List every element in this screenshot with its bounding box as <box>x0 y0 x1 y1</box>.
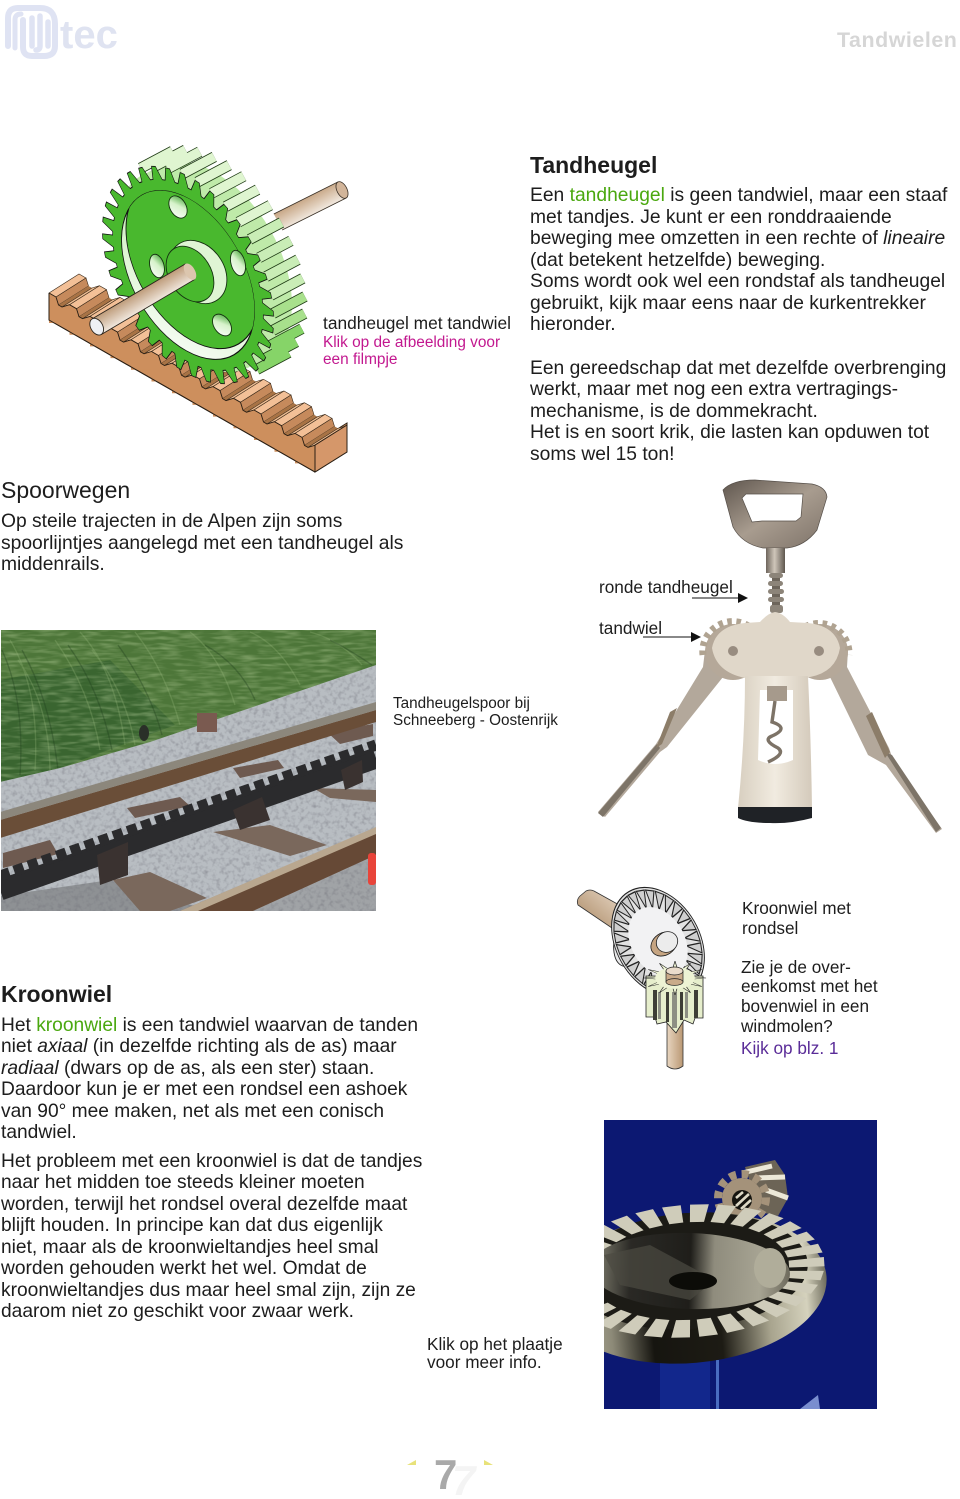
rear axle <box>274 180 351 230</box>
heading: Tandheugel: Tandheugel <box>530 152 657 178</box>
highlights <box>604 1245 786 1300</box>
number: 7 <box>434 1451 457 1498</box>
paragraph: crown wheel definition: Daardoor kun je er met een rondsel een ashoek <box>1 1079 407 1100</box>
blue background <box>604 1120 877 1409</box>
link: film: Klik op de afbeelding voor <box>323 334 500 350</box>
illustration: crown wheel with pinion <box>576 886 706 1070</box>
link: film <box>323 334 500 368</box>
paragraph: car jack: mechanisme, is de dommekracht. <box>530 400 818 422</box>
rail one <box>0 702 376 838</box>
paragraph: crown wheel definition <box>1 1014 418 1143</box>
pinion <box>644 961 706 1033</box>
photo: rack railway <box>1 630 376 911</box>
paragraph: rack explanation: beweging mee omzetten in een rechte of lineaire <box>530 228 945 249</box>
paragraph: railways: Op steile trajecten in de Alpen zijn soms <box>1 511 342 532</box>
reflection <box>660 1360 820 1409</box>
rim <box>547 1201 833 1375</box>
centre hole <box>669 1272 717 1290</box>
input shaft <box>577 890 621 928</box>
caption: click the picture: voor meer info. <box>427 1352 542 1372</box>
photo: metal crown wheel on blue <box>604 1120 877 1409</box>
paragraph: crown wheel problem: niet, maar als de kroonwieltandjes heel smal <box>1 1236 379 1258</box>
left arm <box>598 650 730 817</box>
note: windmill: Zie je de over- <box>741 956 851 976</box>
arrow: ronde tandheugel <box>692 593 748 603</box>
paragraph: railways: middenrails. <box>1 554 105 575</box>
page title: Tandwielen: Tandwielen <box>837 28 957 52</box>
note: windmill <box>741 956 878 1058</box>
logo <box>5 5 118 59</box>
label: ronde tandheugel: ronde tandheugel <box>599 577 733 597</box>
heading: Spoorwegen: Spoorwegen <box>1 477 130 503</box>
paragraph: car jack <box>530 358 946 464</box>
paragraph: car jack: Een gereedschap dat met dezelfde overbrenging <box>530 358 946 378</box>
output shaft <box>667 1020 683 1069</box>
paragraph: rack explanation: Een tandheugel is geen tandwiel, maar een staaf <box>530 185 947 206</box>
paragraph: crown wheel definition: tandwiel. <box>1 1122 77 1143</box>
tooth ring <box>551 1196 829 1346</box>
black base <box>738 807 812 823</box>
right arm <box>822 650 942 833</box>
corkscrew worm <box>767 686 787 762</box>
label: tandwiel: tandwiel <box>599 618 662 638</box>
sleepers <box>3 724 376 911</box>
rail two <box>180 827 376 911</box>
paragraph: car jack: soms wel 15 ton! <box>530 444 674 464</box>
paragraph: rack explanation: hieronder. <box>530 314 616 335</box>
note: windmill: bovenwiel in een <box>741 996 869 1016</box>
paragraph: crown wheel definition: Het kroonwiel is een tandwiel waarvan de tanden <box>1 1014 418 1036</box>
stem <box>766 548 785 573</box>
paragraph: rack explanation: met tandjes. Je kunt er een ronddraaiende <box>530 206 892 228</box>
gravel <box>0 660 376 911</box>
paragraph: crown wheel problem: worden gehouden werkt het wel. Omdat de <box>1 1258 367 1279</box>
handle <box>723 480 827 548</box>
gear face <box>589 1230 791 1312</box>
paragraph: crown wheel problem: naar het midden toe steeds kleiner moeten <box>1 1172 365 1193</box>
paragraph: crown wheel definition: van 90° mee maken, net als met een conisch <box>1 1100 384 1122</box>
small pinion <box>718 1160 788 1222</box>
spiral rack <box>768 573 784 613</box>
caption: crown wheel with pinion: rondsel <box>742 918 798 938</box>
paragraph: crown wheel definition: niet axiaal (in dezelfde richting als de as) maar <box>1 1036 397 1057</box>
note: windmill: windmolen? <box>741 1016 833 1036</box>
text block: Kroonwiel <box>1 981 422 1322</box>
caption: railway photo: Tandheugelspoor bij <box>393 695 530 712</box>
paragraph: rack explanation: (dat betekent hetzelfde) beweging. <box>530 250 825 270</box>
logo: tec <box>60 13 118 57</box>
paragraph: railways <box>1 511 403 575</box>
body with window <box>738 676 812 808</box>
paragraph: crown wheel problem: blijft houden. In principe kan dat dus eigenlijk <box>1 1215 383 1236</box>
red object <box>368 853 376 885</box>
link: film: een filmpje <box>323 351 397 368</box>
text block: Tandheugel <box>530 152 948 464</box>
heading: Kroonwiel: Kroonwiel <box>1 981 112 1007</box>
caption: click the picture: Klik op het plaatje <box>427 1334 563 1354</box>
paragraph: crown wheel problem <box>1 1150 422 1322</box>
paragraph: rack explanation: gebruikt, kijk maar eens naar de kurkentrekker <box>530 292 926 314</box>
gear <box>102 145 308 384</box>
paragraph: crown wheel definition: radiaal (dwars op de as, als een ster) staan. <box>1 1058 374 1078</box>
rack <box>49 274 347 472</box>
photo: corkscrew <box>598 480 942 833</box>
note: windmill: Kijk op blz. 1 <box>741 1038 838 1058</box>
grass <box>0 630 376 785</box>
paragraph: railways: spoorlijntjes aangelegd met een tandheugel als <box>1 532 403 554</box>
illustration: rack and pinion <box>48 145 348 473</box>
caption: railway photo: Schneeberg - Oostenrijk <box>393 712 558 729</box>
caption: railway photo <box>393 695 558 729</box>
caption: rack and pinion <box>323 313 511 368</box>
paragraph: crown wheel problem: Het probleem met een kroonwiel is dat de tandjes <box>1 1150 422 1172</box>
caption: crown wheel with pinion: Kroonwiel met <box>742 898 851 918</box>
paragraph: crown wheel problem: kroonwieltandjes dus maar heel smal zijn, zijn ze <box>1 1280 416 1300</box>
note: windmill: eenkomst met het <box>741 976 878 996</box>
geared plate <box>703 612 849 680</box>
decoration: small yellow marks <box>407 1460 493 1465</box>
caption: crown wheel with pinion <box>742 898 851 938</box>
caption: click the picture <box>427 1334 563 1372</box>
text block: Spoorwegen <box>1 477 403 575</box>
page number: 7 <box>407 1451 493 1499</box>
caption line: tandheugel met tandwiel <box>323 313 511 333</box>
paragraph: car jack: Het is en soort krik, die lasten kan opduwen tot <box>530 422 929 443</box>
arrow: tandwiel <box>643 632 701 642</box>
paragraph: car jack: werkt, maar met nog een extra vertragings- <box>530 379 898 400</box>
paragraph: crown wheel problem: daarom niet zo geschikt voor zwaar werk. <box>1 1301 354 1322</box>
toothed rack <box>0 745 376 890</box>
paragraph: rack explanation <box>530 185 948 335</box>
crown wheel <box>593 871 723 1013</box>
paragraph: crown wheel problem: worden, terwijl het rondsel overal dezelfde maat <box>1 1194 407 1214</box>
front axle <box>87 261 199 337</box>
paragraph: rack explanation: Soms wordt ook wel een rondstaf als tandheugel <box>530 271 945 292</box>
